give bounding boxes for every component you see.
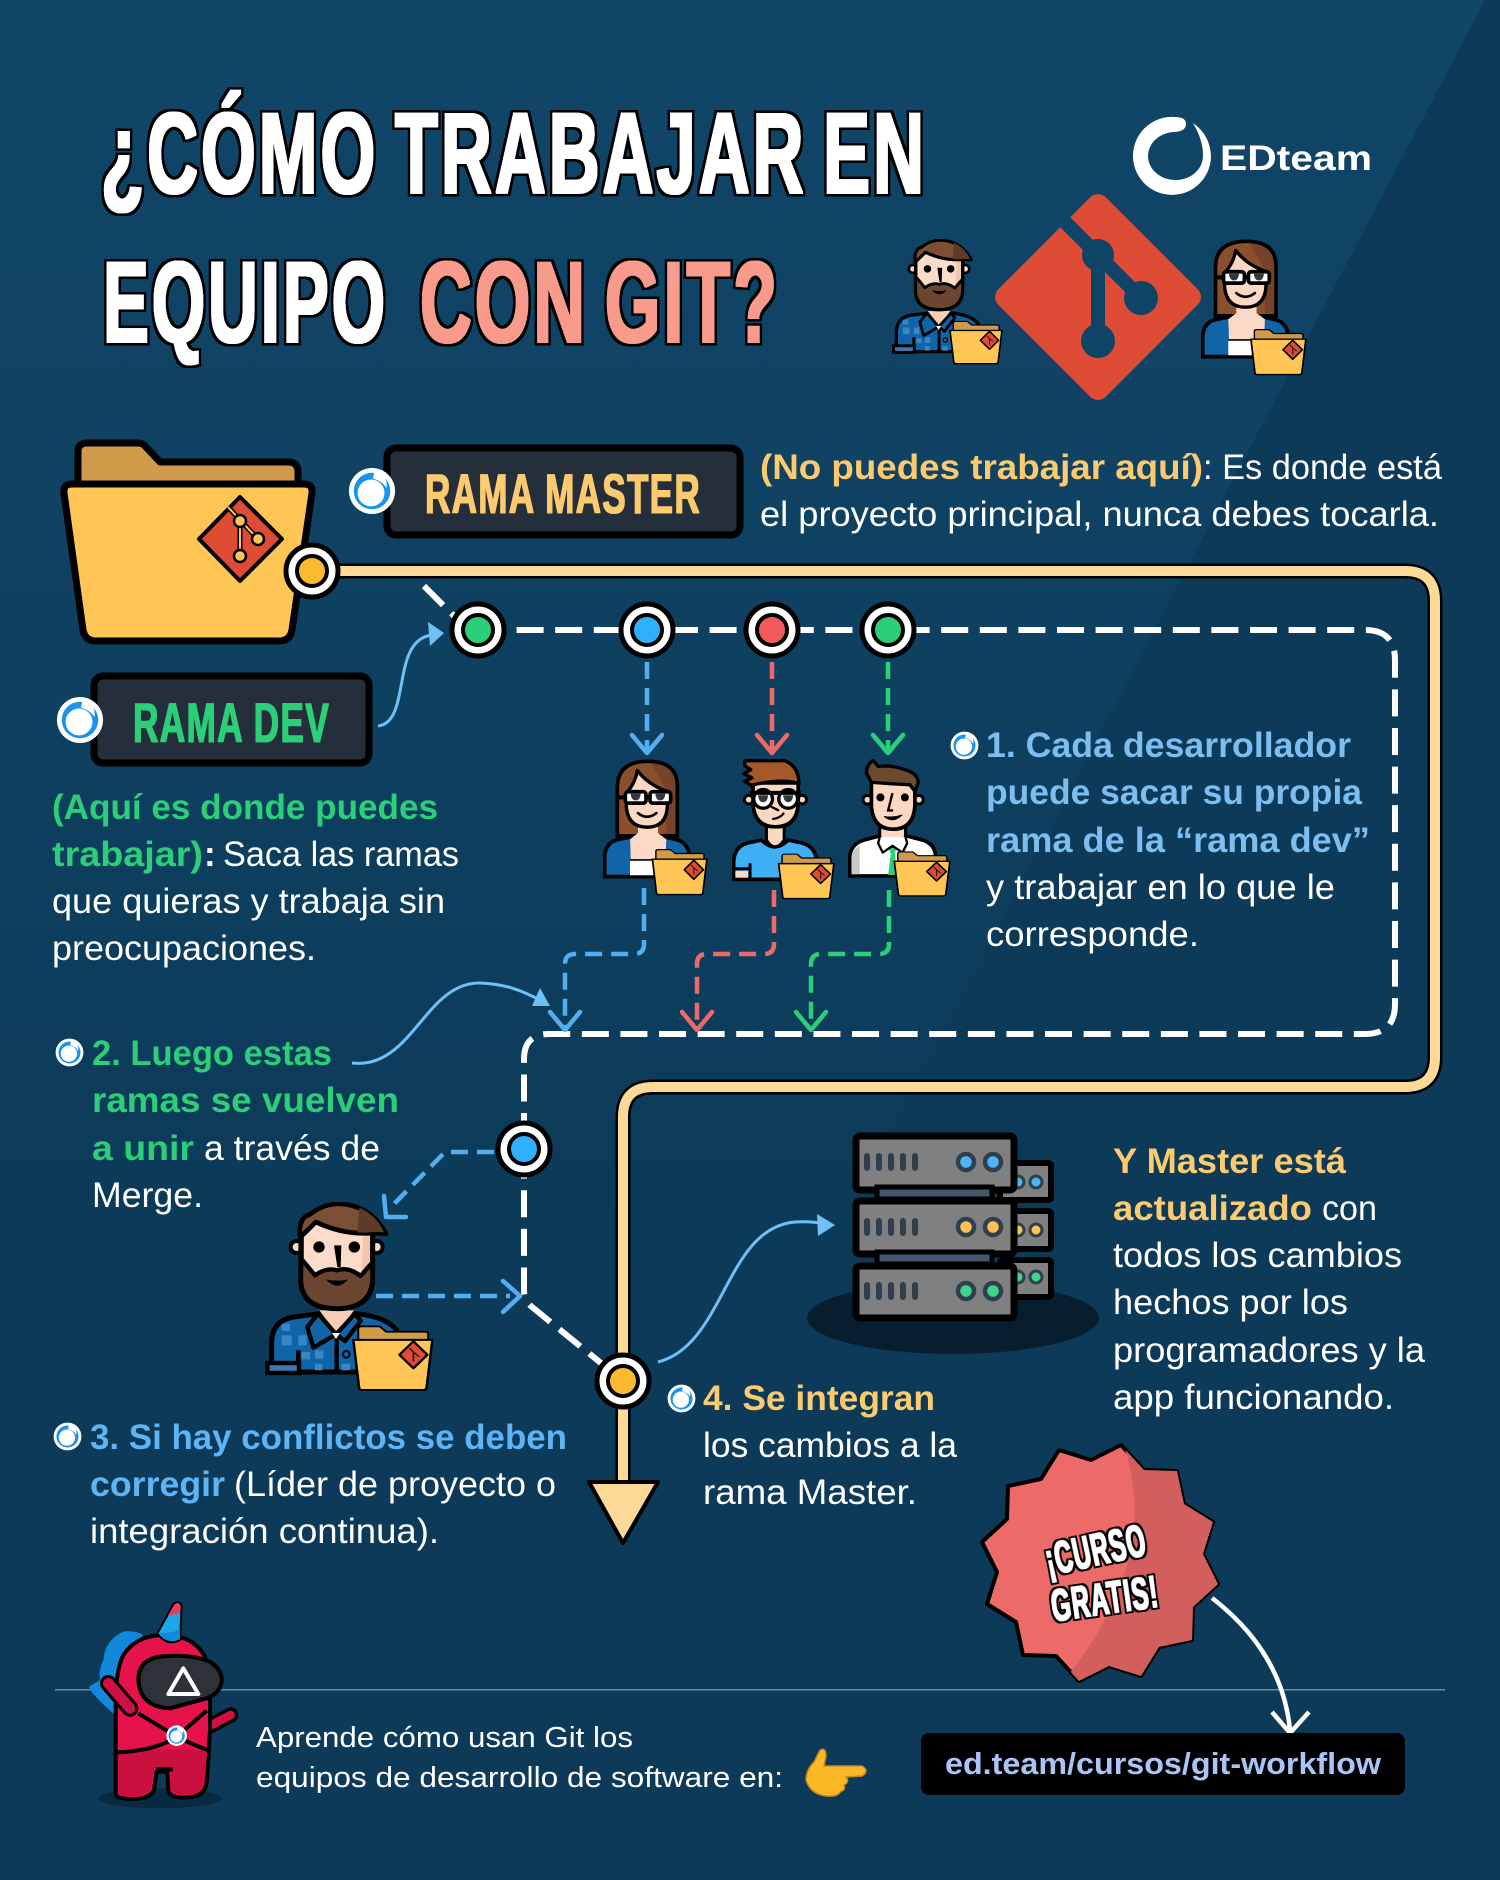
text: master updated: actualizado [1113,1189,1312,1228]
arrow: red branch down [757,662,787,753]
text: master updated [1113,1142,1426,1417]
text: footer call to action: Aprende cómo usan Git los [256,1722,633,1754]
text: step 1: y trabajar en lo que le [986,868,1335,907]
text: step 4: los cambios a la [703,1426,958,1465]
text: master updated: app funcionando. [1113,1378,1394,1417]
title: EQUIPO [103,239,388,367]
text: step 2 [92,1034,399,1215]
icon: bullet master [349,468,395,514]
text: step 2: Merge. [92,1176,203,1215]
icon: servers [807,1136,1099,1354]
title: ¿CÓMO TRABAJAR EN [101,90,927,218]
text: step 1 [986,726,1370,954]
badge: rama master: RAMA MASTER [425,462,701,525]
node: green branch [862,604,914,656]
text: master updated: Y Master está [1113,1142,1347,1181]
divider [55,1689,1445,1690]
text: master description: : Es donde está [1203,448,1443,487]
icon: main folder [64,443,312,641]
icon: pointing hand [806,1749,866,1796]
text: step 4: rama Master. [703,1473,917,1512]
logo: EDteam [1133,117,1372,195]
badge: rama dev [94,676,369,763]
badge: curso gratis: ¡CURSO [1041,1514,1151,1585]
node: master start [286,545,338,597]
text: rama dev description [52,788,459,968]
arrow: green branch down [873,662,903,753]
background diagonal panel [498,0,1500,1880]
arrow: green merge [796,890,889,1030]
badge: curso gratis [982,1440,1230,1685]
text: step 1: puede sacar su propia [986,773,1363,812]
text: step 2: 2. Luego estas [92,1034,332,1073]
text: rama dev description: (Aquí es donde puedes [52,788,438,827]
node: red branch [746,604,798,656]
node: blue branch [621,604,673,656]
arrow: badge to link [1212,1598,1309,1733]
text: step 3: 3. Si hay conflictos se deben [90,1418,567,1457]
arrow: lead developer to merge line [376,1281,520,1312]
text: rama dev description: : [204,835,216,874]
arrow: step 4 to server [658,1214,835,1362]
text: step 1: rama de la “rama dev” [986,821,1370,860]
icon: git logo large [1006,205,1190,389]
node: integrate master [597,1355,649,1407]
node: dev green [452,604,504,656]
icon: bullet step 3 [54,1423,81,1450]
text: step 1: corresponde. [986,915,1199,954]
icon: bullet step 4 [668,1385,695,1412]
text: master updated: todos los cambios [1113,1236,1402,1275]
link box: ed.team/cursos/git-workflow [945,1746,1382,1781]
text: footer call to action [256,1722,783,1794]
icon: developer with tie [850,760,950,896]
text: step 1: 1. Cada desarrollador [986,726,1351,765]
arrow: red merge [682,890,774,1030]
badge: curso gratis: GRATIS! [1048,1566,1162,1631]
text: master updated: hechos por los [1113,1283,1348,1322]
logo: EDteam: EDteam [1220,139,1372,178]
text: master description: (No puedes trabajar aquí) [760,448,1203,487]
arrow: blue branch down [632,662,662,753]
text: step 3: (Líder de proyecto o [234,1465,556,1504]
icon: woman developer top [1203,241,1306,375]
badge: rama master [387,448,740,535]
arrow: dev to first node [378,622,444,726]
text: step 3: integración continua). [90,1512,439,1551]
text: step 3 [90,1418,567,1551]
arrow: blue merge [550,888,644,1030]
mascot [89,1602,231,1808]
text: step 4 [703,1379,958,1512]
badge: rama dev: RAMA DEV [133,691,330,754]
text: step 2: a través de [204,1129,380,1168]
text: rama dev description: trabajar) [52,835,203,874]
text: step 3: corregir [90,1465,225,1504]
text: rama dev description: preocupaciones. [52,929,316,968]
icon: bearded developer top [894,240,1002,364]
master line [312,571,1435,1543]
text: footer call to action: equipos de desarrollo de software en: [256,1762,783,1794]
icon: developer with glasses [734,761,834,899]
icon: lead developer [267,1204,432,1390]
text: master updated: programadores y la [1113,1331,1426,1370]
icon: bullet step 1 [951,732,978,759]
text: step 4: 4. Se integran [703,1379,935,1418]
icon: bullet dev [57,697,103,743]
text: master description: el proyecto principal, nunca debes tocarla. [760,495,1439,534]
link box [921,1733,1405,1795]
text: rama dev description: que quieras y trabaja sin [52,882,445,921]
text: master description [760,448,1443,534]
icon: bullet step 2 [56,1039,83,1066]
title: CON GIT? [420,239,780,367]
text: step 2: a unir [92,1129,194,1168]
arrow: merge node to lead developer [384,1152,494,1217]
icon: woman developer [605,761,707,895]
text: step 2: ramas se vuelven [92,1081,399,1120]
text: master updated: con [1322,1189,1377,1228]
dev dashed line [424,586,1395,1381]
node: merge blue [498,1123,550,1175]
text: rama dev description: Saca las ramas [223,835,459,874]
arrow: step 2 to merge line [352,983,550,1063]
title [101,90,927,367]
